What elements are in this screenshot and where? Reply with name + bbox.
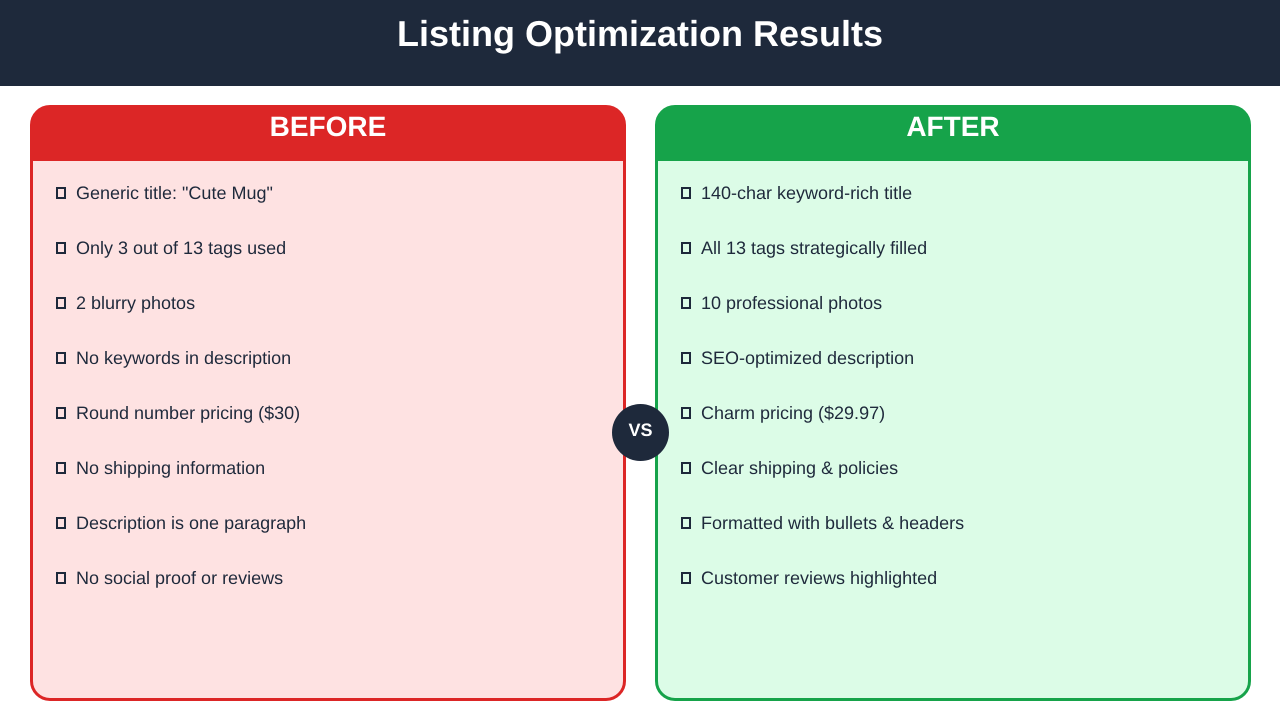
list item: 140-char keyword-rich title [701,183,912,203]
list item: Charm pricing ($29.97) [701,403,885,423]
VS badge [612,404,669,461]
title: Listing Optimization Results [397,13,883,54]
list item: Generic title: "Cute Mug" [76,183,273,203]
panel heading: after: AFTER [906,111,1000,142]
list item: Clear shipping & policies [701,458,898,478]
list item: Customer reviews highlighted [701,568,937,588]
list item: No social proof or reviews [76,568,283,588]
list item: Round number pricing ($30) [76,403,300,423]
panel heading: before: BEFORE [270,111,386,142]
list item: 10 professional photos [701,293,882,313]
panel: after [655,105,1251,701]
VS badge: VS [628,420,652,440]
panel: before [30,105,626,701]
list item: Formatted with bullets & headers [701,513,964,533]
list item: No keywords in description [76,348,291,368]
list item: Description is one paragraph [76,513,306,533]
header band [0,0,1280,86]
list item: SEO-optimized description [701,348,914,368]
list item: 2 blurry photos [76,293,195,313]
list item: No shipping information [76,458,265,478]
list item: Only 3 out of 13 tags used [76,238,286,258]
list item: All 13 tags strategically filled [701,238,927,258]
